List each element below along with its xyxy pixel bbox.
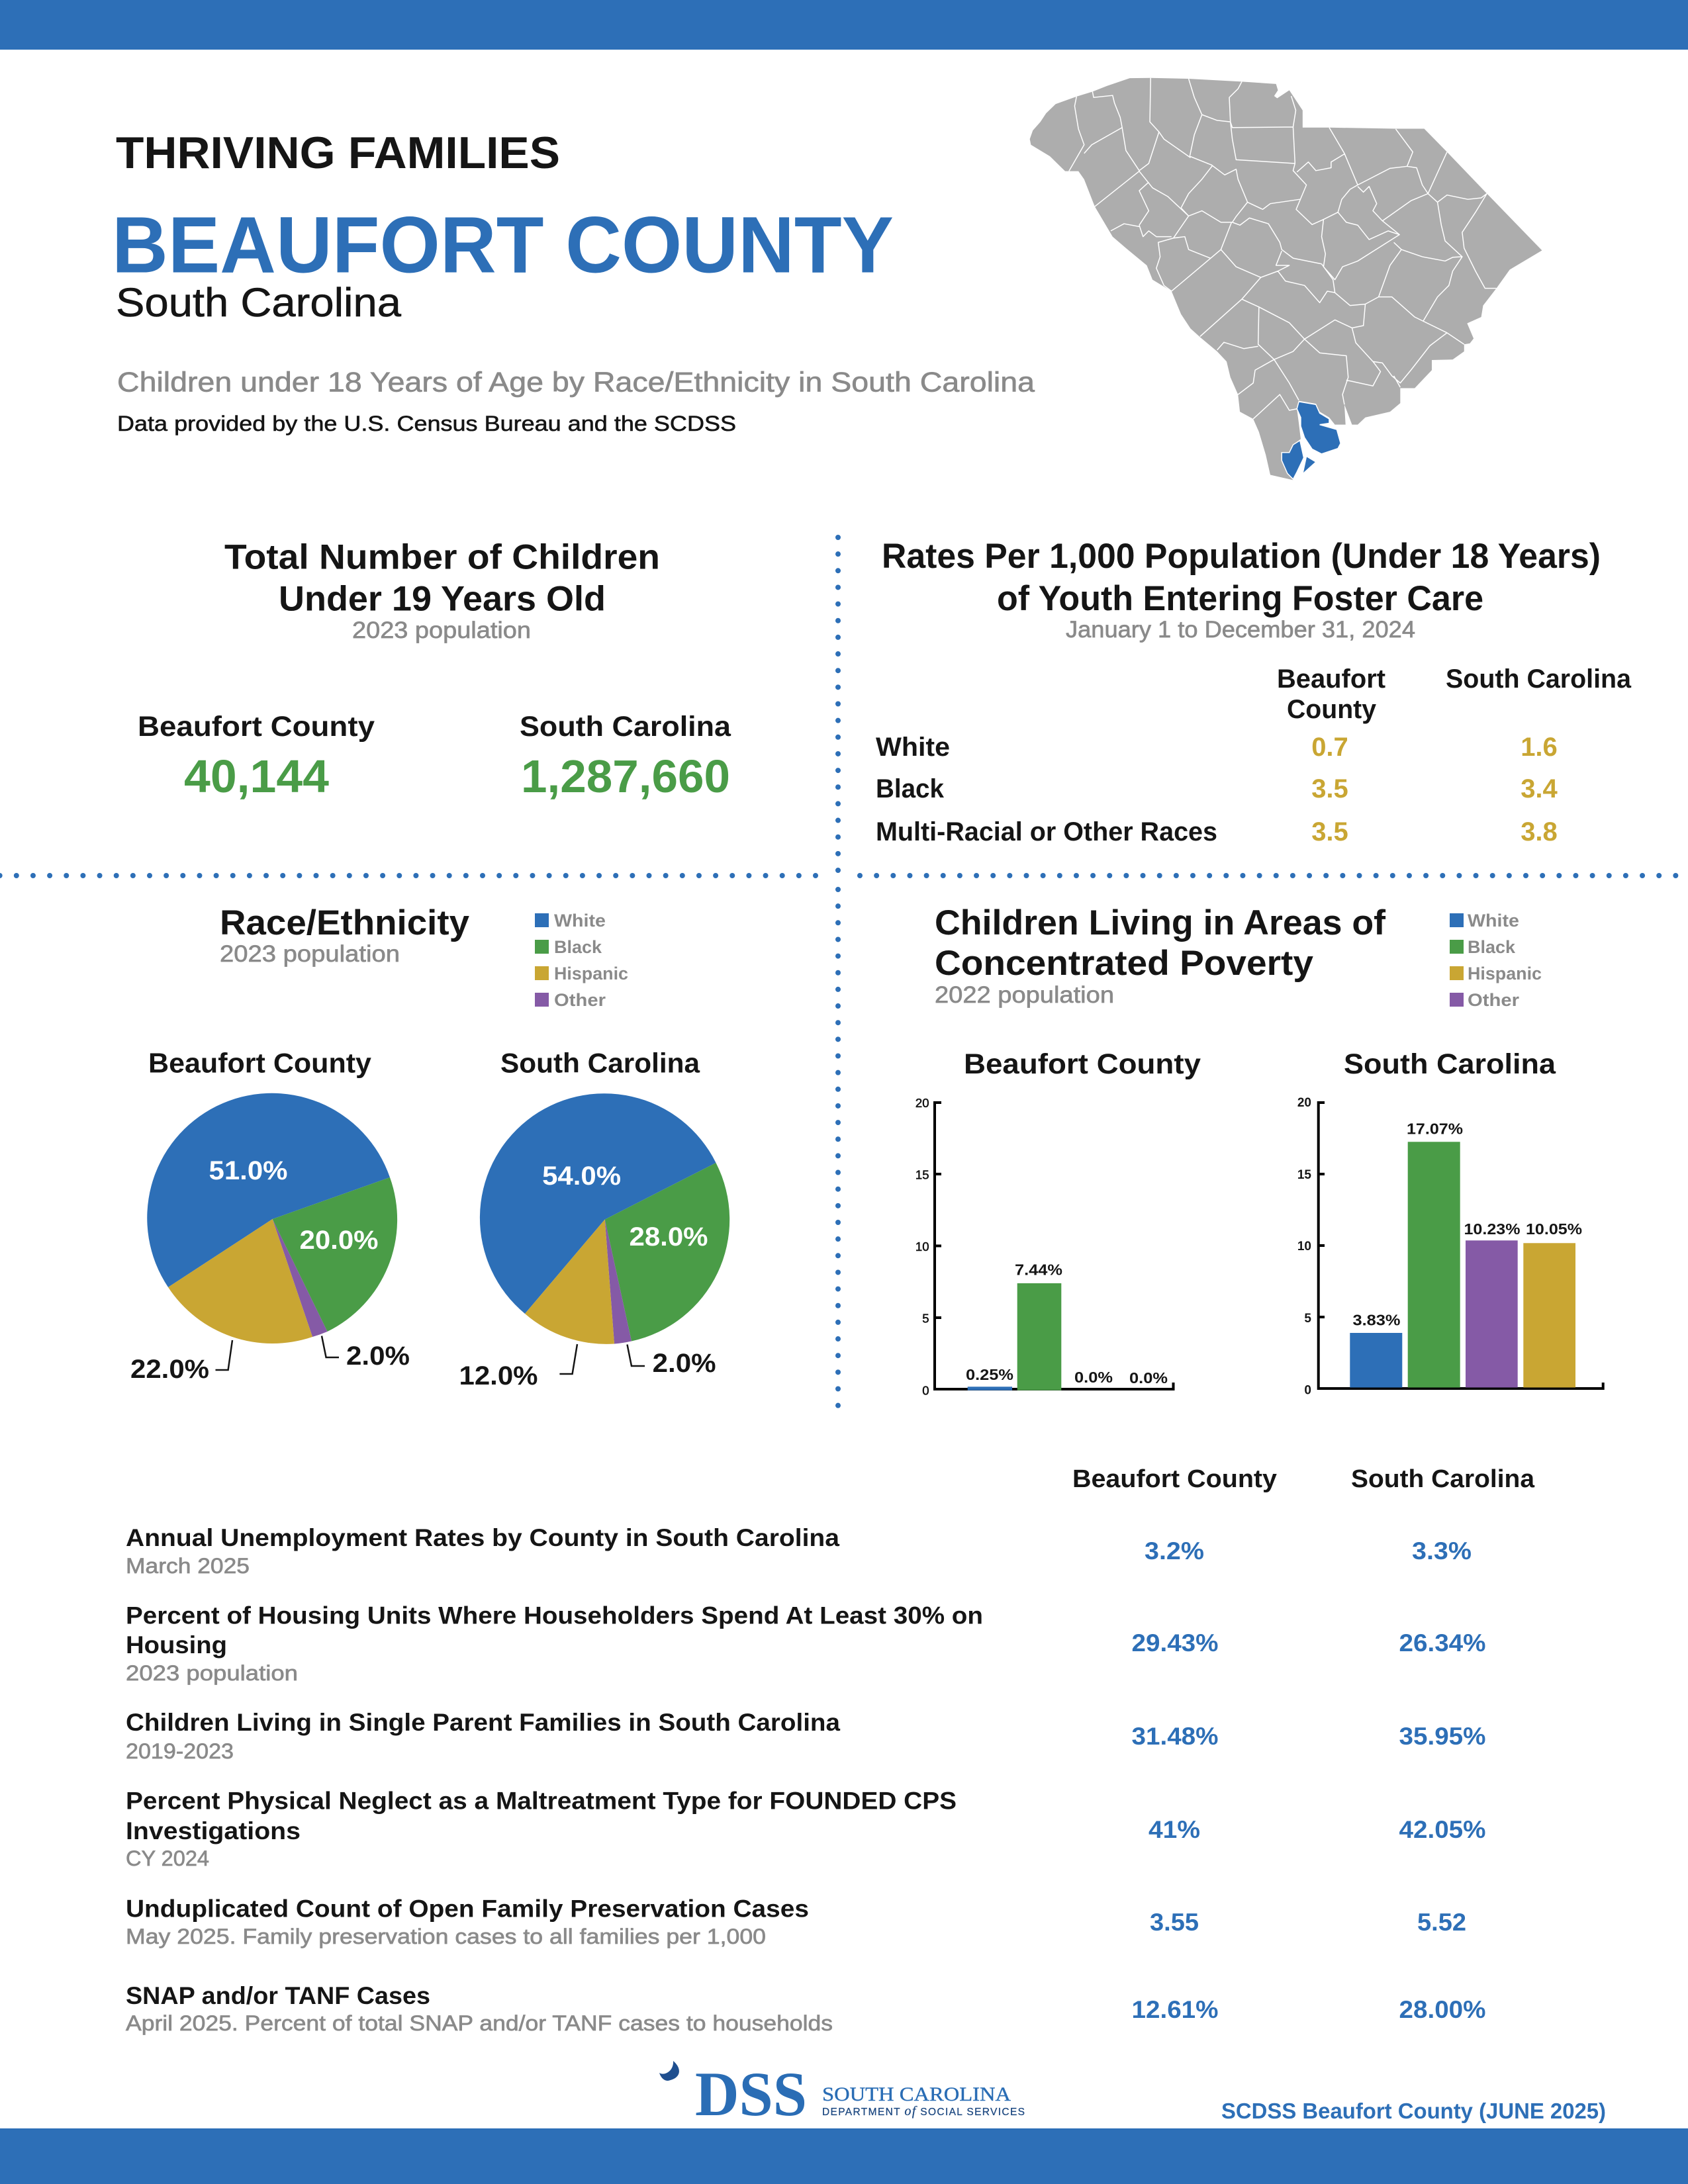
row: unemployment: 3.2% xyxy=(1145,1537,1204,1565)
row: single parent families xyxy=(126,1709,1485,1763)
row: housing: 26.34% xyxy=(1399,1629,1485,1657)
row: physical neglect xyxy=(126,1787,1485,1870)
row: unemployment: 3.3% xyxy=(1412,1537,1472,1565)
panel: indicators table xyxy=(126,1465,1535,2035)
title: BEAUFORT COUNTY xyxy=(112,200,894,290)
state value: 1,287,660 xyxy=(521,751,730,802)
bar chart: South Carolina: 10.23% xyxy=(1464,1220,1520,1238)
row: SNAP and TANF: 28.00% xyxy=(1399,1996,1485,2023)
bar chart: South Carolina: 15 xyxy=(1297,1168,1311,1182)
pie chart: Beaufort County: 20.0% xyxy=(299,1226,379,1255)
subheading: January 1 to December 31, 2024 xyxy=(1066,617,1415,643)
row: unemployment: Annual Unemployment Rates by County in South Carolina xyxy=(126,1524,839,1551)
pie chart: Beaufort County xyxy=(130,1093,410,1384)
subheading: 2023 population xyxy=(220,941,400,967)
chart title: South Carolina: South Carolina xyxy=(1344,1048,1556,1080)
row: unemployment xyxy=(126,1524,1472,1578)
bar chart: Beaufort County: 0.0% xyxy=(1129,1369,1168,1387)
top band xyxy=(0,0,1688,50)
row: single parent families: Children Living in Single Parent Families in South Carolina xyxy=(126,1709,840,1736)
chart title: Beaufort County: Beaufort County xyxy=(964,1048,1201,1080)
panel: concentrated poverty: Concentrated Poverty xyxy=(935,944,1314,983)
state label: South Carolina xyxy=(520,711,731,743)
bar chart: South Carolina xyxy=(1297,1096,1603,1398)
footer credit: SCDSS Beaufort County (JUNE 2025) xyxy=(1221,2099,1606,2123)
heading: Children Living in Areas of xyxy=(935,903,1385,942)
row: SNAP and TANF: SNAP and/or TANF Cases xyxy=(126,1982,430,2009)
pie chart: South Carolina: 2.0% xyxy=(653,1349,716,1378)
dotted divider: vertical lower xyxy=(835,889,841,1406)
row: single parent families: 2019-2023 xyxy=(126,1739,234,1763)
bar chart: South Carolina: 3.83% xyxy=(1353,1312,1401,1329)
row: housing: 2023 population xyxy=(126,1661,298,1685)
logo: SC DSS xyxy=(659,2059,1025,2129)
bar chart: South Carolina: 17.07% xyxy=(1407,1120,1463,1137)
row: SNAP and TANF: April 2025. Percent of total SNAP and/or TANF cases to households xyxy=(126,2011,833,2035)
legend: White xyxy=(1468,911,1519,931)
heading: Rates Per 1,000 Population (Under 18 Years) xyxy=(882,537,1601,576)
legend: Other xyxy=(1468,990,1520,1010)
row: single parent families: 35.95% xyxy=(1399,1723,1485,1750)
dotted divider: horizontal right xyxy=(860,873,1688,878)
panel: race/ethnicity xyxy=(130,903,729,1390)
pie title: Beaufort County: Beaufort County xyxy=(148,1047,372,1079)
row: family preservation: 5.52 xyxy=(1417,1909,1466,1936)
panel: foster care rates: County xyxy=(1287,695,1377,724)
panel: total number of children xyxy=(138,537,731,802)
row: White: White xyxy=(876,733,950,762)
Beaufort County xyxy=(1282,402,1340,479)
bar chart: South Carolina: 10.05% xyxy=(1526,1220,1582,1238)
column header: South Carolina: South Carolina xyxy=(1351,1465,1535,1493)
bar chart: South Carolina: 0 xyxy=(1304,1384,1311,1398)
bar chart: South Carolina: 20 xyxy=(1297,1096,1311,1110)
heading: Total Number of Children xyxy=(224,537,660,577)
logo department name: DEPARTMENT of SOCIAL SERVICES xyxy=(822,2104,1025,2118)
dotted divider: vertical upper xyxy=(835,536,841,870)
row: housing: Percent of Housing Units Where Householders Spend At Least 30% on xyxy=(126,1602,983,1629)
legend: Black xyxy=(1468,937,1516,957)
row: housing: 29.43% xyxy=(1132,1629,1218,1657)
county label: Beaufort County xyxy=(138,711,375,743)
row: family preservation: Unduplicated Count of Open Family Preservation Cases xyxy=(126,1895,809,1922)
dotted divider: horizontal left xyxy=(0,873,816,878)
panel: foster care rates: 3.4 xyxy=(1521,774,1558,803)
row: physical neglect: Investigations xyxy=(126,1817,301,1844)
subheading: 2022 population xyxy=(935,982,1114,1008)
row: SNAP and TANF: 12.61% xyxy=(1132,1996,1218,2023)
panel: concentrated poverty xyxy=(915,903,1603,1398)
pie chart: South Carolina: 54.0% xyxy=(542,1161,621,1191)
pie chart: Beaufort County: 2.0% xyxy=(346,1342,410,1371)
subheading: 2023 population xyxy=(352,617,531,643)
header text block xyxy=(112,128,1035,435)
bar chart: Beaufort County xyxy=(915,1096,1173,1398)
column header: Beaufort County: Beaufort County xyxy=(1072,1465,1277,1493)
panel: foster care rates: 0.7 xyxy=(1311,733,1348,762)
legend: Black xyxy=(554,937,602,957)
row: single parent families: 31.48% xyxy=(1132,1723,1218,1750)
panel: foster care rates xyxy=(876,537,1632,846)
row: physical neglect: Percent Physical Neglect as a Maltreatment Type for FOUNDED CPS xyxy=(126,1787,957,1815)
row: family preservation: 3.55 xyxy=(1150,1909,1199,1936)
data source: Data provided by the U.S. Census Bureau and the SCDSS xyxy=(117,412,736,435)
bar chart: Beaufort County: 0 xyxy=(922,1383,929,1398)
row: family preservation: May 2025. Family preservation cases to all families per 1,000 xyxy=(126,1925,766,1948)
pie title: South Carolina: South Carolina xyxy=(500,1047,700,1079)
bar chart: South Carolina: 10 xyxy=(1297,1240,1311,1253)
legend xyxy=(1450,911,1542,1010)
logo state name: SOUTH CAROLINA xyxy=(822,2083,1011,2105)
panel: foster care rates: 3.5 xyxy=(1311,817,1348,846)
pie chart: South Carolina: 12.0% xyxy=(459,1361,538,1390)
map of South Carolina with Beaufort County highlighted xyxy=(1030,78,1542,480)
pie chart: South Carolina xyxy=(459,1093,729,1390)
bar chart: South Carolina: 5 xyxy=(1304,1312,1311,1326)
bottom band xyxy=(0,2128,1688,2184)
legend: Other xyxy=(554,990,606,1010)
row: Multi-Racial: Multi-Racial or Other Races xyxy=(876,817,1217,846)
row: housing xyxy=(126,1602,1485,1685)
county value: 40,144 xyxy=(184,751,329,802)
legend: Hispanic xyxy=(554,964,628,983)
state name: South Carolina xyxy=(116,280,401,325)
row: family preservation xyxy=(126,1895,1466,1948)
bar chart: Beaufort County: 5 xyxy=(922,1312,929,1325)
pie chart: South Carolina: 28.0% xyxy=(629,1222,708,1251)
legend: White xyxy=(554,911,606,931)
bar chart: Beaufort County: 15 xyxy=(915,1167,929,1182)
column header: state: South Carolina xyxy=(1446,664,1632,694)
logo wordmark: DSS xyxy=(695,2059,807,2129)
heading: Race/Ethnicity xyxy=(220,903,470,942)
panel: foster care rates: 3.8 xyxy=(1521,817,1558,846)
row: unemployment: March 2025 xyxy=(126,1554,250,1578)
subtitle: Children under 18 Years of Age by Race/Ethnicity in South Carolina xyxy=(117,367,1035,397)
bar chart: Beaufort County: 10 xyxy=(915,1240,929,1253)
column header: county: Beaufort xyxy=(1277,664,1385,694)
bar chart: Beaufort County: 0.0% xyxy=(1074,1369,1113,1386)
pie chart: Beaufort County: 51.0% xyxy=(209,1156,287,1185)
panel: foster care rates: 3.5 xyxy=(1311,774,1348,803)
panel: foster care rates: 1.6 xyxy=(1521,733,1558,762)
row: SNAP and TANF xyxy=(126,1982,1485,2035)
row: physical neglect: 42.05% xyxy=(1399,1816,1485,1843)
row: physical neglect: 41% xyxy=(1149,1816,1200,1843)
bar chart: Beaufort County: 0.25% xyxy=(966,1366,1013,1383)
panel: total number of children: Under 19 Years Old xyxy=(279,580,606,618)
panel: foster care rates: of Youth Entering Foster Care xyxy=(997,579,1483,618)
row: physical neglect: CY 2024 xyxy=(126,1846,209,1870)
bar chart: Beaufort County: 7.44% xyxy=(1015,1261,1062,1279)
pie chart: Beaufort County: 22.0% xyxy=(130,1355,209,1384)
row: housing: Housing xyxy=(126,1631,227,1659)
legend xyxy=(535,911,628,1010)
bar chart: Beaufort County: 20 xyxy=(915,1096,929,1110)
row: Black: Black xyxy=(876,774,945,803)
icon: crescent moon xyxy=(659,2061,679,2081)
county boundaries xyxy=(1069,78,1497,419)
legend: Hispanic xyxy=(1468,964,1542,983)
eyebrow: THRIVING FAMILIES xyxy=(116,128,560,178)
